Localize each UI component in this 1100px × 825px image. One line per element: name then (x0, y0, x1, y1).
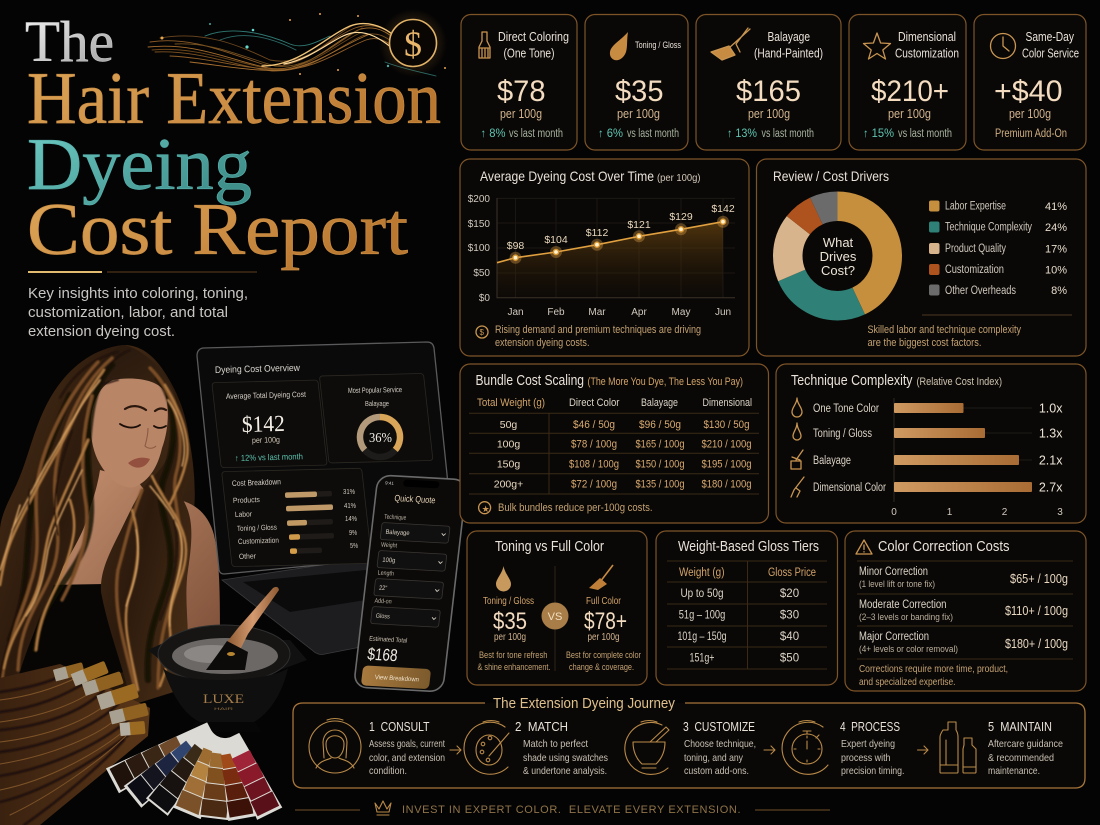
panel: the extension dyeing journey (293, 696, 1085, 788)
line chart: $104 (544, 234, 568, 246)
phone with quick quote: Length (377, 570, 394, 577)
panel: toning vs full color: $35 (493, 608, 527, 635)
panel: color correction costs (845, 531, 1086, 691)
step: process (782, 720, 904, 777)
front hair mass, left side (0, 345, 125, 700)
note with star icon: ★ (482, 504, 490, 514)
bar chart: 2 (1002, 507, 1008, 518)
bar chart (891, 398, 1063, 518)
step: process: process with (841, 752, 891, 764)
card: balayage: Balayage (768, 29, 810, 44)
table: $46 / 50g (573, 419, 615, 431)
panel: weight-based gloss tiers: $40 (780, 631, 799, 643)
panel: toning vs full color: Best for tone refresh (479, 650, 548, 661)
note with star icon: Bulk bundles reduce per-100g costs. (498, 502, 652, 514)
step: consult (309, 718, 445, 777)
icon: toning drop (496, 566, 511, 592)
card: toning gloss: $35 (615, 75, 664, 108)
table: $135 / 100g (636, 478, 684, 490)
panel: toning vs full color: Best for complete color (566, 650, 641, 661)
hair strands, back to front (0, 350, 188, 692)
panel: toning vs full color: Full Color (586, 595, 621, 607)
table: $108 / 100g (569, 458, 619, 470)
phone with quick quote: Weight (381, 542, 398, 549)
line chart: $98 (507, 240, 524, 252)
step: customize: Choose technique, (684, 738, 756, 750)
subtitle: extension dyeing cost. (28, 323, 175, 340)
panel: technique complexity: (Relative Cost Index) (916, 376, 1002, 388)
panel: technique complexity: Technique Complexity (791, 373, 913, 389)
laptop: Dyeing Cost Overview (215, 363, 300, 376)
panel: weight-based gloss tiers: Weight-Based Gloss Tiers (678, 539, 819, 555)
panel: color correction costs: Minor Correction (859, 566, 928, 578)
card: same-day service: Premium Add-On (995, 128, 1067, 140)
donut chart: Drives (820, 249, 857, 264)
step: match: 2 MATCH (515, 720, 568, 734)
panel: weight-based gloss tiers: Gloss Price (768, 567, 816, 579)
table: $96 / 50g (639, 419, 681, 431)
table: 150g (497, 458, 520, 470)
laptop: Balayage (365, 401, 389, 408)
panel: toning vs full color: & shine enhancement. (478, 662, 550, 673)
legend: Technique Complexity (945, 222, 1032, 234)
subtitle: Key insights into coloring, toning, (28, 285, 248, 302)
step: customize (625, 720, 756, 777)
subtitle: customization, labor, and total (28, 304, 228, 321)
footer tagline with crown: INVEST IN EXPERT COLOR. ELEVATE EVERY EXTENSION. (402, 804, 742, 816)
bar chart: 1 (947, 507, 953, 518)
color mixing bowl with brush: LUXE (203, 691, 244, 706)
technique icons (791, 398, 804, 497)
line chart: $0 (479, 293, 490, 304)
donut chart: Cost? (821, 263, 855, 278)
phone with quick quote: Add-on (374, 598, 392, 606)
vs badge (542, 602, 568, 630)
laptop: Products (233, 495, 260, 505)
line chart: May (672, 307, 690, 318)
line chart: $50 (473, 268, 490, 279)
step: match: Match to perfect (523, 738, 588, 750)
card: direct coloring: per 100g (500, 107, 542, 121)
title: Hair Extension (27, 58, 441, 140)
arrow (450, 746, 461, 754)
step: customize: toning, and any (684, 752, 744, 764)
panel: cost drivers (756, 159, 1086, 356)
phone with quick quote (354, 475, 467, 692)
panel: color correction costs: Major Correction (859, 631, 929, 643)
panel: weight-based gloss tiers: Up to 50g (680, 588, 724, 600)
table: Balayage (641, 397, 678, 409)
legend: 17% (1045, 244, 1067, 256)
bar chart: 1.3x (1039, 426, 1063, 440)
card: direct coloring: vs last month (509, 128, 563, 140)
laptop: Most Popular Service (348, 385, 402, 395)
line chart: $100 (468, 243, 490, 254)
laptop: Customization (238, 536, 279, 546)
panel: toning vs full color: change & coverage. (569, 662, 634, 673)
table: $150 / 100g (636, 458, 684, 470)
arrow (918, 746, 928, 754)
legend: Product Quality (945, 243, 1006, 255)
panel: toning vs full color (467, 531, 647, 685)
card: dimensional customization: Dimensional (898, 29, 956, 44)
gauge (360, 417, 400, 457)
title: The (25, 9, 114, 74)
card: direct coloring (461, 14, 577, 150)
card: toning gloss: Toning / Gloss (635, 40, 681, 51)
laptop: Average Total Dyeing Cost (226, 390, 307, 401)
phone with quick quote: Technique (384, 514, 407, 522)
phone with quick quote: 22" (379, 585, 388, 592)
card: direct coloring: $78 (497, 75, 546, 108)
panel: weight-based gloss tiers (656, 531, 838, 685)
panel: weight-based gloss tiers: $30 (780, 610, 799, 622)
panel: weight-based gloss tiers: Weight (g) (679, 567, 725, 579)
panel: weight-based gloss tiers: 51g – 100g (679, 610, 725, 622)
subtitle (28, 285, 248, 340)
panel: bundle cost scaling: (The More You Dye, The Less You Pay) (588, 376, 743, 388)
swatch fan (106, 717, 282, 821)
panel: technique complexity: Balayage (813, 455, 851, 467)
arrow (764, 746, 775, 754)
laptop: 41% (344, 501, 356, 510)
icon: warning (856, 540, 872, 554)
color mixing bowl with brush: HAIR (214, 706, 233, 711)
step: process: 4 PROCESS (840, 720, 900, 734)
hair extension bundles (0, 661, 150, 825)
panel: cost drivers: Review / Cost Drivers (773, 168, 889, 184)
card: toning gloss: vs last month (627, 128, 679, 140)
panel: toning vs full color: per 100g (494, 631, 526, 643)
step: maintain: & recommended (988, 752, 1054, 764)
panel: color correction costs: (1 level lift or tone fix) (859, 579, 935, 589)
decorative wave with dollar icon: $ (404, 24, 422, 64)
title (25, 9, 441, 271)
icon: star (864, 33, 890, 59)
skin: neck, chest and shoulder (55, 470, 220, 650)
woman with long balayage hair (0, 345, 220, 705)
laptop: per 100g (252, 435, 280, 445)
legend: 10% (1045, 264, 1067, 276)
line chart: Jun (715, 307, 731, 318)
laptop: 5% (350, 541, 358, 550)
step: consult: 1 CONSULT (369, 720, 430, 734)
title: Cost Report (27, 189, 408, 271)
panel: technique complexity: Toning / Gloss (813, 428, 872, 440)
card: direct coloring: ↑ 8% (480, 128, 506, 140)
panel: weight-based gloss tiers: 151g+ (690, 653, 715, 665)
black top (14, 584, 124, 690)
line chart: $112 (586, 227, 608, 239)
panel: toning vs full color: Toning vs Full Color (495, 539, 604, 555)
hero illustration (0, 342, 467, 825)
donut chart: What (823, 235, 854, 250)
footer tagline with crown (295, 801, 830, 816)
laptop: Toning / Gloss (237, 523, 277, 533)
panel: average dyeing cost over time: (per 100g) (657, 172, 700, 184)
card: direct coloring: Direct Coloring (498, 29, 569, 44)
vs badge: VS (548, 611, 562, 623)
phone with quick quote: 9:41 (385, 480, 395, 486)
step: match: shade using swatches (523, 752, 608, 764)
card: direct coloring: (One Tone) (504, 46, 554, 60)
line chart: $121 (627, 219, 651, 231)
card: balayage: (Hand-Painted) (754, 46, 823, 60)
line chart: $150 (468, 219, 490, 230)
panel: color correction costs: Color Correction Costs (878, 539, 1010, 555)
card: toning gloss: per 100g (617, 107, 660, 121)
note with icon (476, 324, 701, 349)
step: process: Expert dyeing (841, 738, 895, 750)
phone with quick quote: Gloss (375, 613, 391, 621)
bar chart: 1.0x (1039, 402, 1063, 416)
card: toning gloss: ↑ 6% (598, 128, 623, 140)
card: toning gloss (585, 14, 688, 150)
laptop (197, 342, 455, 654)
laptop: 9% (349, 528, 357, 537)
panel: bundle cost scaling (460, 364, 768, 523)
card: dimensional customization: $210+ (871, 75, 949, 108)
table: 200g+ (494, 478, 523, 490)
panel: color correction costs: $65+ / 100g (1010, 572, 1068, 586)
panel: average dyeing cost over time: Average Dyeing Cost Over Time (480, 168, 654, 184)
laptop: $142 (241, 411, 285, 437)
step: consult: Assess goals, current (369, 738, 445, 750)
panel: color correction costs: (4+ levels or color removal) (859, 644, 958, 654)
step: consult: condition. (369, 765, 407, 777)
step: match: & undertone analysis. (523, 765, 607, 777)
donut chart (788, 206, 887, 306)
phone with quick quote: 100g (382, 557, 396, 564)
step: customize: 3 CUSTOMIZE (683, 720, 755, 734)
panel: color correction costs: Moderate Correction (859, 599, 946, 611)
line chart (468, 194, 735, 318)
panel: toning vs full color: $78+ (584, 608, 627, 635)
table: 100g (497, 438, 520, 450)
card: same-day service: +$40 (994, 75, 1062, 108)
bar chart: 2.7x (1039, 480, 1063, 494)
line chart: Jan (507, 307, 524, 318)
legend: 41% (1045, 201, 1067, 213)
phone with quick quote: Balayage (385, 529, 410, 537)
laptop: Cost Breakdown (232, 477, 281, 488)
panel: technique complexity: One Tone Color (813, 403, 879, 415)
laptop dashboard panels (211, 373, 444, 567)
laptop: 14% (345, 514, 357, 523)
legend: Customization (945, 264, 1004, 276)
legend: Labor Expertise (945, 200, 1006, 212)
face (91, 378, 168, 487)
table: $180 / 100g (702, 478, 752, 490)
line chart: $129 (669, 211, 693, 223)
panel: toning vs full color: Toning / Gloss (483, 595, 534, 607)
icon: balayage brush (711, 28, 750, 60)
title: Dyeing (27, 124, 252, 206)
note with icon: $ (480, 328, 484, 337)
panel: toning vs full color: per 100g (588, 631, 620, 643)
step: customize: custom add-ons. (684, 765, 749, 777)
card: dimensional customization: Customization (895, 46, 959, 60)
card: dimensional customization: vs last month (898, 128, 952, 140)
legend: 8% (1051, 285, 1067, 297)
bar chart: 0 (891, 507, 897, 518)
icon: brush (479, 32, 490, 58)
line chart: Mar (588, 307, 606, 318)
panel: cost drivers: are the biggest cost factors. (868, 337, 982, 349)
panel: weight-based gloss tiers: $50 (780, 653, 799, 665)
step: maintain: 5 MAINTAIN (988, 720, 1052, 734)
icon: drop (610, 32, 628, 60)
legend: Other Overheads (945, 285, 1016, 297)
phone with quick quote: View Breakdown (374, 674, 420, 684)
laptop: 31% (343, 487, 355, 496)
panel: technique complexity (776, 364, 1086, 523)
card: dimensional customization (849, 14, 966, 150)
step: consult: color, and extension (369, 752, 445, 764)
line chart: Feb (547, 307, 565, 318)
panel: cost drivers: Skilled labor and technique complexity (868, 324, 1021, 336)
phone with quick quote: $168 (366, 645, 399, 665)
laptop: Labor (235, 509, 252, 519)
step: maintain: maintenance. (988, 765, 1040, 777)
table: $165 / 100g (636, 438, 684, 450)
table: Direct Color (569, 397, 620, 409)
icon: full color brush (589, 565, 613, 590)
panel: weight-based gloss tiers: 101g – 150g (678, 631, 726, 643)
bar chart: 2.1x (1039, 454, 1063, 468)
legend: 24% (1045, 222, 1067, 234)
panel: average dyeing cost over time (460, 159, 749, 356)
laptop: ↑ 12% vs last month (235, 451, 303, 463)
icon: clock (990, 34, 1016, 58)
card: balayage: ↑ 13% (727, 128, 757, 140)
panel: color correction costs: and specialized expertise. (859, 676, 956, 688)
laptop: Other (239, 551, 257, 561)
card: same-day service (974, 14, 1086, 150)
card: balayage: per 100g (748, 107, 790, 121)
panel: the extension dyeing journey: The Extension Dyeing Journey (493, 696, 676, 712)
legend (929, 200, 1067, 297)
card: balayage (696, 14, 841, 150)
line chart: Apr (631, 307, 647, 318)
step: match (464, 720, 608, 777)
card: balayage: $165 (736, 75, 801, 108)
panel: color correction costs: $110+ / 100g (1005, 604, 1068, 618)
table: $78 / 100g (571, 438, 617, 450)
panel: weight-based gloss tiers: $20 (780, 588, 799, 600)
table: 50g (500, 419, 517, 431)
table: Total Weight (g) (477, 397, 545, 409)
front hair mass, right side (101, 345, 191, 705)
step: maintain (940, 720, 1063, 777)
table (469, 397, 759, 494)
decorative wave with dollar icon (148, 9, 447, 77)
panel: color correction costs: (2–3 levels or banding fix) (859, 612, 953, 622)
line chart: $200 (468, 194, 490, 205)
table: $72 / 100g (571, 478, 617, 490)
table: $210 / 100g (702, 438, 752, 450)
note with icon: extension dyeing costs. (495, 337, 590, 349)
step: maintain: Aftercare guidance (988, 738, 1063, 750)
card: dimensional customization: per 100g (888, 107, 931, 121)
card: same-day service: per 100g (1009, 107, 1051, 121)
step: process: precision timing. (841, 765, 904, 777)
panel: color correction costs: $180+ / 100g (1005, 637, 1068, 651)
panel: color correction costs: Corrections require more time, product, (859, 663, 1008, 675)
gauge: 36% (369, 431, 392, 446)
phone with quick quote: Quick Quote (394, 493, 436, 505)
card: dimensional customization: ↑ 15% (863, 128, 894, 140)
card: same-day service: Color Service (1022, 46, 1079, 60)
table: $130 / 50g (704, 419, 750, 431)
table: $195 / 100g (702, 458, 752, 470)
color mixing bowl with brush (148, 587, 307, 732)
panel: bundle cost scaling: Bundle Cost Scaling (476, 373, 584, 389)
card: balayage: vs last month (762, 128, 814, 140)
line chart: $142 (711, 203, 735, 215)
gold rule (28, 271, 257, 273)
note with icon: Rising demand and premium techniques are driving (495, 324, 701, 336)
panel: technique complexity: Dimensional Color (813, 482, 886, 494)
phone with quick quote: Estimated Total (369, 636, 408, 645)
bar chart: 3 (1057, 507, 1063, 518)
card: same-day service: Same-Day (1026, 29, 1074, 44)
table: Dimensional (702, 397, 752, 409)
